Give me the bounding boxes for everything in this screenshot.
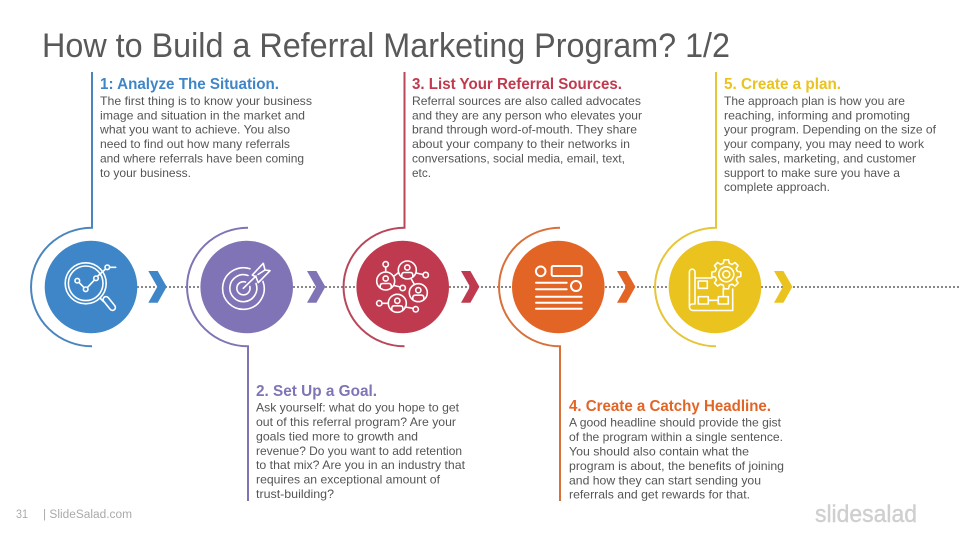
- step 4: headline: [499, 228, 635, 501]
- step 2: goal: [187, 228, 325, 501]
- circle 1: [45, 241, 137, 333]
- body 2: goals tied more to growth and: [256, 430, 418, 444]
- title: How to Build a Referral Marketing Program? 1/2: [42, 27, 730, 65]
- body 5: reaching, informing and promoting: [724, 109, 910, 122]
- body 2: out of this referral program? Are your: [256, 416, 456, 429]
- step 3: referral sources: [344, 72, 479, 346]
- body 2: trust-building?: [256, 488, 335, 501]
- body 1: [99, 95, 312, 180]
- body 2: to that mix? Are you in an industry that: [256, 459, 466, 472]
- heading 5: 5. Create a plan.: [724, 76, 841, 93]
- chevron 1: [148, 271, 167, 303]
- body 2: revenue? Do you want to add retention: [256, 445, 462, 458]
- body 5: your company, you may need to work: [724, 138, 924, 151]
- body 4: and how they can start sending you: [569, 474, 761, 487]
- heading 2: 2. Set Up a Goal.: [256, 383, 377, 400]
- body 3: etc.: [412, 167, 431, 180]
- text block 5: [723, 76, 937, 194]
- footer logo: slidesalad: [815, 501, 917, 528]
- chevron 3: [461, 271, 479, 303]
- body 4: You should also contain what the: [569, 446, 749, 458]
- body 1: image and situation in the market and: [100, 109, 305, 122]
- icon: magnifier with chart: [65, 263, 116, 308]
- body 3: and they are any person who elevates your: [412, 109, 642, 122]
- body 2: [256, 402, 466, 501]
- text block 2: [256, 383, 466, 501]
- heading 1: 1: Analyze The Situation.: [100, 76, 279, 93]
- text block 4: [569, 398, 784, 502]
- circle 2: [200, 241, 293, 333]
- body 3: conversations, social media, email, text,: [412, 152, 625, 165]
- body 5: with sales, marketing, and customer: [723, 152, 916, 165]
- circle 4: [512, 241, 605, 333]
- chevron 4: [617, 271, 635, 303]
- icon: target with arrow: [223, 263, 270, 309]
- bracket line 3: [344, 72, 404, 346]
- chevron 2: [307, 271, 325, 303]
- body 5: [723, 95, 937, 194]
- bracket line 2: [187, 228, 248, 501]
- step 5: plan: [655, 72, 792, 346]
- icon: referral network: [377, 261, 428, 312]
- body 4: program is about, the benefits of joining: [569, 460, 784, 473]
- body 5: The approach plan is how you are: [724, 95, 905, 108]
- chevron 5: [774, 271, 792, 303]
- body 4: A good headline should provide the gist: [569, 417, 782, 430]
- bracket line 1: [31, 72, 92, 346]
- dotted timeline connector: [137, 286, 960, 288]
- heading 4: 4. Create a Catchy Headline.: [569, 398, 771, 415]
- circle 5: [669, 241, 761, 333]
- text block 3: [412, 76, 642, 180]
- circle 3: [356, 241, 449, 333]
- body 1: and where referrals have been coming: [100, 152, 304, 165]
- body 1: what you want to achieve. You also: [99, 124, 291, 137]
- body 1: need to find out how many referrals: [100, 138, 290, 151]
- body 2: requires an exceptional amount of: [256, 474, 441, 487]
- body 1: to your business.: [100, 167, 191, 180]
- body 4: referrals and get rewards for that.: [569, 489, 750, 502]
- body 4: of the program within a single sentence.: [569, 431, 783, 444]
- body 3: [412, 95, 642, 180]
- body 2: Ask yourself: what do you hope to get: [256, 402, 460, 415]
- body 5: support to make sure you have a: [724, 167, 901, 180]
- body 3: brand through word-of-mouth. They share: [412, 124, 637, 137]
- icon: article layout: [536, 266, 582, 309]
- body 5: your program. Depending on the size of: [724, 124, 937, 137]
- body 4: [569, 417, 784, 502]
- body 3: about your company to their networks in: [412, 138, 630, 151]
- bracket line 5: [655, 72, 716, 346]
- bracket line 4: [499, 228, 560, 501]
- text block 1: [99, 76, 312, 180]
- body 1: The first thing is to know your business: [100, 95, 312, 108]
- icon: blueprint with gear: [689, 260, 741, 310]
- step 1: analyze: [31, 72, 167, 346]
- footer page number: 31: [16, 509, 28, 521]
- body 5: complete approach.: [724, 181, 830, 194]
- heading 3: 3. List Your Referral Sources.: [412, 76, 622, 93]
- footer site name: | SlideSalad.com: [43, 509, 132, 521]
- body 3: Referral sources are also called advocates: [412, 95, 641, 108]
